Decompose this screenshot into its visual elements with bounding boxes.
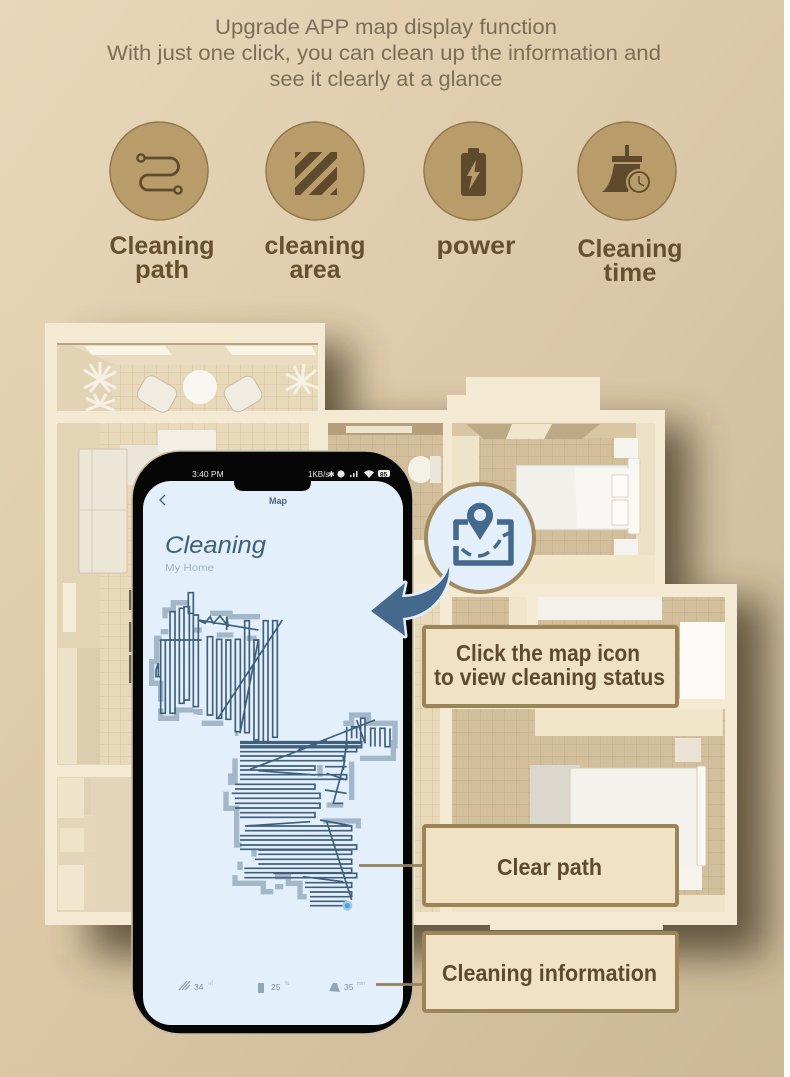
area stat (179, 980, 213, 992)
label: cleaning area (264, 232, 366, 284)
time stat (329, 981, 365, 992)
phone screen (143, 481, 403, 1025)
label: cleaning path: path (135, 256, 189, 284)
title: see it clearly at a glance (270, 68, 502, 91)
time stat: 35 (344, 982, 354, 992)
my home: My Home (165, 563, 214, 574)
upper bedroom (415, 423, 655, 584)
living room (57, 423, 309, 765)
battery stat (258, 981, 290, 993)
battery stat: 25 (271, 982, 281, 992)
callout: clear path (424, 826, 677, 905)
house shadow (90, 345, 765, 955)
icon: power (424, 122, 522, 220)
cleaning heading: Cleaning (165, 532, 267, 559)
callout: click the map icon: Click the map icon (456, 640, 640, 666)
floor plan (45, 323, 737, 930)
bathroom (328, 423, 443, 585)
cleaned area map: upper (152, 593, 395, 750)
arrow (371, 567, 449, 636)
callout: click the map icon: to view cleaning status (434, 664, 665, 690)
connector: cleaning information (376, 983, 423, 986)
status bar: 1KB/s (308, 470, 329, 479)
area stat: 34 (194, 982, 204, 992)
label: cleaning area: area (290, 256, 342, 284)
phone (129, 451, 413, 1034)
callout: cleaning information: Cleaning information (442, 960, 657, 986)
callout: click the map icon (424, 627, 677, 706)
status bar: 85 (380, 472, 388, 478)
label: cleaning time (578, 235, 682, 287)
connector: clear path (359, 864, 423, 867)
label: power: power (436, 232, 516, 260)
cleaned area map: lower (226, 740, 393, 911)
icon: cleaning path (110, 122, 208, 220)
lower rooms (415, 597, 725, 912)
title (107, 16, 661, 91)
back arrow (160, 495, 165, 505)
icon: map pin (456, 503, 511, 563)
status bar: ✱ (328, 470, 335, 479)
battery stat: % (285, 981, 290, 987)
label: cleaning time: Cleaning (578, 235, 682, 263)
storage room (57, 777, 147, 912)
label: cleaning time: time (604, 259, 657, 287)
title: Upgrade APP map display function (215, 16, 557, 39)
title: With just one click, you can clean up the information and (107, 42, 661, 65)
label: cleaning path (110, 232, 214, 284)
label: cleaning path: Cleaning (110, 232, 214, 260)
map icon badge (426, 484, 534, 592)
outer walls (45, 323, 737, 930)
screen title: Map (269, 496, 288, 506)
icon: cleaning time (578, 122, 676, 220)
status bar: 3:40 PM (192, 469, 224, 479)
status bar (192, 469, 390, 479)
time stat: min (357, 981, 365, 987)
icon: cleaning area (266, 122, 364, 220)
callout: cleaning information (424, 933, 677, 1011)
callout: clear path: Clear path (497, 854, 602, 880)
notch (234, 480, 311, 491)
stats row (179, 980, 365, 993)
balcony (57, 343, 318, 415)
area stat: ㎡ (208, 980, 213, 987)
label: cleaning area: cleaning (264, 232, 366, 260)
